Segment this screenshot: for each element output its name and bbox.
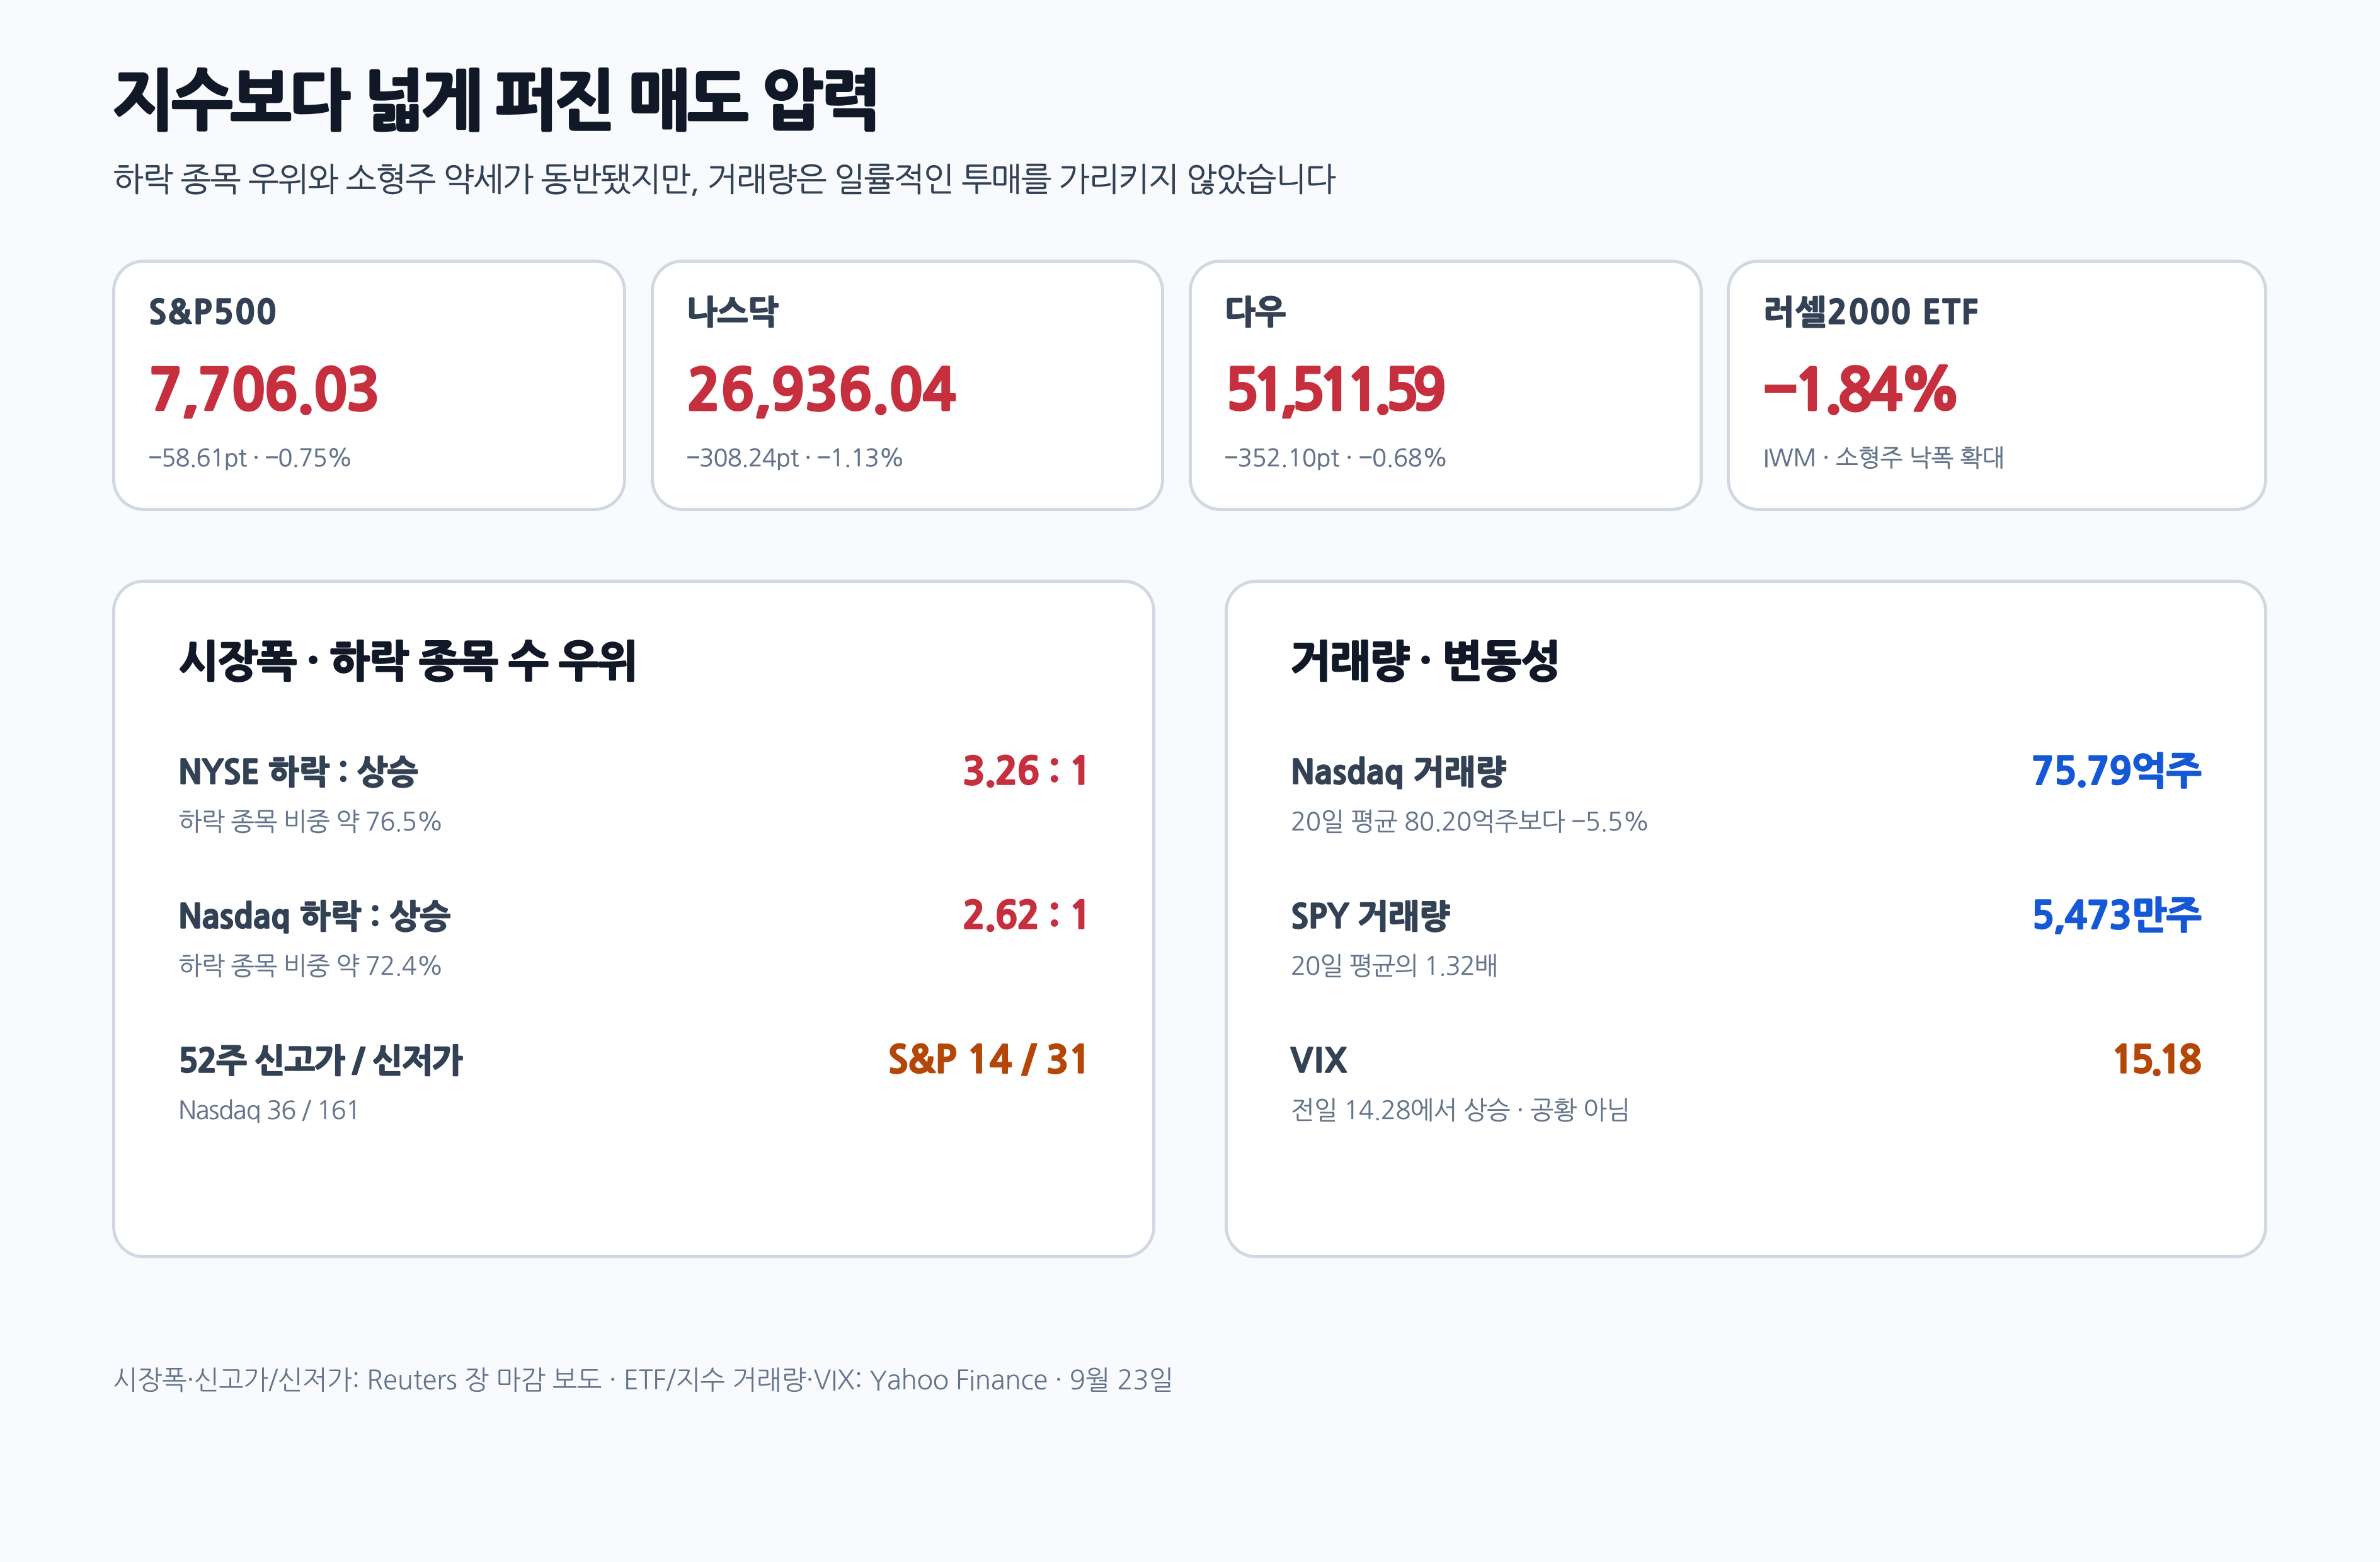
note: 20일 평균의 1.32배 bbox=[1291, 953, 1497, 979]
panel: 다우 card bbox=[1189, 260, 1703, 511]
value: 15.18 bbox=[2111, 1041, 2199, 1079]
heading: 거래량 · 변동성 bbox=[1291, 640, 1560, 683]
value: 7,706.03 bbox=[149, 362, 379, 418]
note: Nasdaq 36 / 161 bbox=[178, 1098, 360, 1123]
subtitle: 하락 종목 우위와 소형주 약세가 동반됐지만, 거래량은 일률적인 투매를 가리키지 않았습니다 bbox=[113, 163, 1335, 196]
label: VIX bbox=[1291, 1045, 1349, 1077]
label: 나스닥 bbox=[687, 296, 778, 329]
panel: 나스닥 card bbox=[651, 260, 1164, 511]
note: 전일 14.28에서 상승 · 공황 아님 bbox=[1291, 1098, 1630, 1123]
panel: 러셀2000 ETF card bbox=[1727, 260, 2267, 511]
row: Nasdaq bbox=[178, 897, 1091, 979]
value: 5,473만주 bbox=[2032, 897, 2201, 934]
value: −1.84% bbox=[1763, 362, 1957, 418]
value: 3.26 : 1 bbox=[963, 752, 1091, 790]
change: IWM · 소형주 낙폭 확대 bbox=[1763, 446, 2005, 470]
panel: market breadth bbox=[112, 580, 1155, 1258]
row: NYSE bbox=[178, 752, 1091, 834]
label: S&P500 bbox=[149, 296, 277, 329]
value: S&P 14 / 31 bbox=[888, 1041, 1091, 1079]
label: 러셀2000 ETF bbox=[1763, 296, 1979, 329]
row: 52-week highs and lows bbox=[178, 1041, 1091, 1123]
label: Nasdaq 거래량 bbox=[1291, 756, 1506, 789]
label: 다우 bbox=[1225, 296, 1286, 329]
label: 52주 신고가 / 신저가 bbox=[178, 1045, 462, 1077]
change: −58.61pt · −0.75% bbox=[149, 446, 352, 470]
row: Nasdaq volume bbox=[1291, 752, 2201, 834]
row: SPY volume bbox=[1291, 896, 2201, 979]
label: SPY 거래량 bbox=[1291, 900, 1450, 933]
row: VIX bbox=[1290, 1041, 2201, 1123]
change: −352.10pt · −0.68% bbox=[1225, 446, 1448, 470]
panel: volume and volatility bbox=[1225, 580, 2267, 1258]
label: Nasdaq 하락 : 상승 bbox=[178, 900, 450, 933]
value: 2.62 : 1 bbox=[963, 897, 1091, 934]
change: −308.24pt · −1.13% bbox=[687, 446, 905, 470]
value: 75.79억주 bbox=[2032, 752, 2201, 790]
note: 20일 평균 80.20억주보다 −5.5% bbox=[1291, 809, 1650, 834]
note: 하락 종목 비중 약 72.4% bbox=[178, 953, 443, 979]
value: 51,511.59 bbox=[1225, 362, 1440, 418]
title: 지수보다 넓게 퍼진 매도 압력 bbox=[113, 68, 879, 134]
footer source note: 시장폭·신고가/신저가: Reuters 장 마감 보도 · ETF/지수 거래량·VIX: Yahoo Finance · 9월 23일 bbox=[113, 1367, 1174, 1394]
label: NYSE 하락 : 상승 bbox=[178, 756, 418, 789]
value: 26,936.04 bbox=[687, 362, 956, 418]
panel: S&P500 card bbox=[112, 260, 626, 511]
heading: 시장폭 · 하락 종목 수 우위 bbox=[178, 640, 638, 683]
note: 하락 종목 비중 약 76.5% bbox=[178, 809, 443, 834]
